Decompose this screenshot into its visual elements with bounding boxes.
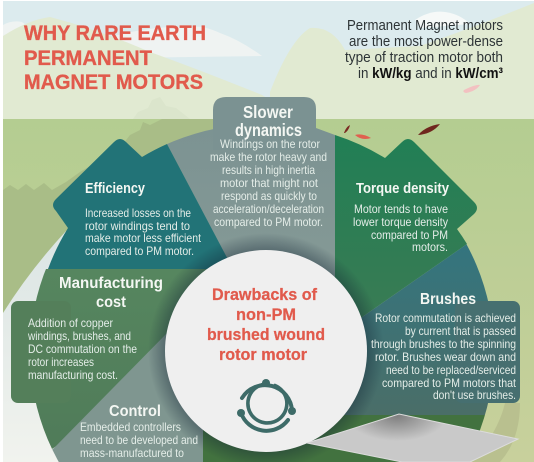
background: lower right wheel shadow — [440, 403, 520, 462]
background: lower left pale field — [3, 231, 66, 462]
text: brushes: rotor. Brushes wear down and — [375, 350, 516, 364]
text: slower dynamics: make the rotor heavy and — [210, 150, 327, 164]
leaves — [344, 85, 480, 139]
text: slower dynamics: compared to PM motor. — [214, 215, 323, 229]
panel tab: brushes — [455, 301, 520, 403]
text: slower dynamics: respond as quickly to — [221, 189, 317, 203]
text: slower dynamics: Windings on the rotor — [220, 137, 320, 151]
centre heading: Drawbacks of — [212, 286, 317, 304]
text: brushes: by current that is passed — [405, 324, 516, 338]
text: slower dynamics — [210, 102, 327, 229]
intro text: in kW/kg and in kW/cm³ — [358, 65, 503, 82]
text: slower dynamics: dynamics — [235, 120, 302, 140]
centre heading: non-PM — [236, 306, 296, 324]
sector: efficiency — [48, 139, 233, 269]
text: control: need to be developed and — [80, 433, 198, 447]
text: manufacturing cost: manufacturing cost. — [28, 368, 118, 382]
text: manufacturing cost: windings, brushes, and — [27, 329, 131, 343]
panel tab: slower dynamics — [213, 97, 335, 150]
centre heading — [207, 286, 325, 364]
centre circle shadow — [148, 233, 384, 462]
sector: torque density — [335, 135, 477, 322]
text: control: mass-manufactured to — [80, 446, 184, 460]
centre circle — [165, 250, 367, 452]
text: manufacturing cost: cost — [96, 294, 127, 311]
centre heading: brushed wound — [207, 326, 325, 344]
intro text: type of traction motor both — [345, 49, 503, 66]
text: torque density: motors. — [412, 240, 448, 254]
text: brushes: Brushes — [420, 291, 476, 308]
text: efficiency — [85, 180, 202, 258]
text: torque density: lower torque density — [353, 215, 448, 229]
text: brushes: compared to PM motors that — [382, 376, 517, 390]
sector: lower green — [203, 415, 485, 462]
text: efficiency: compared to PM motor. — [85, 244, 194, 258]
text: torque density: Motor tends to have — [354, 202, 448, 216]
sector: manufacturing cost — [36, 269, 207, 449]
title: PERMANENT — [24, 47, 152, 70]
text: efficiency: Efficiency — [85, 180, 146, 197]
intro text: Permanent Magnet motors — [347, 17, 503, 34]
background: sky — [3, 1, 534, 119]
text: torque density: compared to PM — [371, 228, 448, 242]
text: control: Control — [109, 403, 161, 420]
text: control: Embedded controllers — [80, 420, 181, 434]
text: slower dynamics: Slower — [243, 102, 293, 122]
text: brushes: don't use brushes. — [433, 388, 516, 402]
title — [24, 22, 206, 94]
wheel — [11, 97, 520, 462]
text: manufacturing cost: DC commutation on the — [28, 342, 137, 356]
text: torque density — [353, 180, 450, 254]
text: manufacturing cost — [27, 275, 163, 382]
background: tree line — [3, 119, 216, 320]
sector: slower dynamics — [167, 129, 335, 277]
text: control — [80, 403, 198, 460]
panel tab: manufacturing cost — [11, 301, 71, 403]
text: slower dynamics: acceleration/deceleration — [213, 202, 324, 216]
text: manufacturing cost: Addition of copper — [28, 316, 113, 330]
sector: control — [52, 334, 203, 462]
text: efficiency: Increased losses on the — [85, 206, 191, 220]
text: slower dynamics: results in high inertia — [222, 163, 315, 177]
text: efficiency: make motor less efficient — [85, 231, 202, 245]
text: manufacturing cost: rotor increases — [28, 355, 94, 369]
text: brushes — [371, 291, 517, 402]
icon: rotor rings — [237, 379, 296, 431]
background: ground — [3, 119, 534, 462]
intro text: are the most power-dense — [349, 33, 503, 50]
text: slower dynamics: motor that might not — [220, 176, 319, 190]
background: hills — [3, 3, 534, 119]
title: WHY RARE EARTH — [24, 22, 206, 45]
metal sheet — [307, 414, 518, 462]
text: manufacturing cost: Manufacturing — [59, 275, 163, 292]
text: torque density: Torque density — [356, 180, 450, 197]
centre heading: rotor motor — [219, 346, 308, 364]
title: MAGNET MOTORS — [24, 71, 203, 94]
sector: brushes — [344, 244, 488, 415]
text: efficiency: rotor windings tend to — [85, 219, 190, 233]
intro text — [345, 17, 503, 82]
background: clouds — [3, 12, 470, 58]
background: hill foliage — [133, 97, 190, 119]
